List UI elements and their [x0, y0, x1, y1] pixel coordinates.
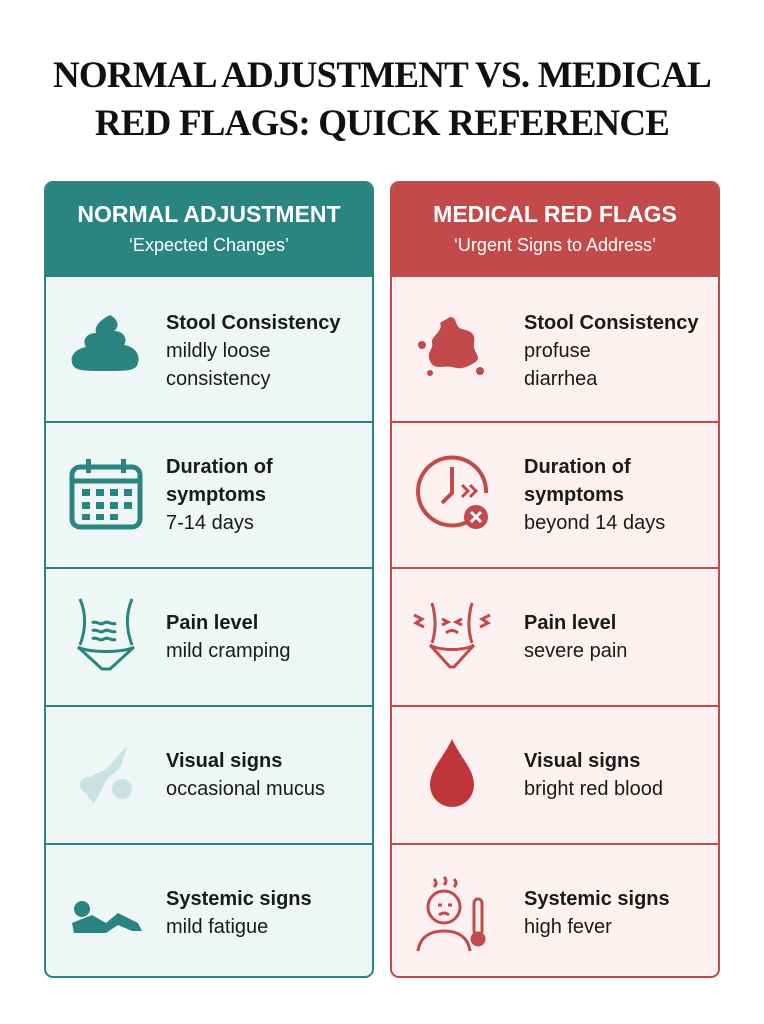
- text: stool red: [524, 312, 698, 390]
- icon: resting person: [72, 901, 142, 933]
- text: systemic red: high fever: [524, 916, 612, 938]
- text: visual: [166, 750, 325, 800]
- title: [53, 55, 711, 144]
- text: systemic red: [524, 888, 670, 938]
- icon: calendar: [70, 459, 142, 530]
- row: stool consistency: [46, 275, 372, 421]
- panel: medical red flags: [390, 181, 720, 978]
- row: duration red: [392, 421, 718, 567]
- icon: abdomen: [77, 598, 135, 670]
- icon: splash: [418, 317, 484, 376]
- icon: fever person: [416, 876, 486, 952]
- header: red flags: [392, 183, 718, 277]
- icon: stool: [72, 315, 138, 371]
- row: systemic: [46, 843, 372, 983]
- row: visual red: [392, 705, 718, 843]
- text: stool: [166, 312, 340, 390]
- text: visual: occasional mucus: [166, 778, 325, 800]
- text: stool red: Stool Consistency: [524, 312, 698, 334]
- text: stool red: profuse: [524, 340, 591, 362]
- text: systemic: mild fatigue: [166, 916, 268, 938]
- text: visual: Visual signs: [166, 750, 282, 772]
- text: stool: mildly loose: [166, 340, 270, 362]
- text: pain red: severe pain: [524, 640, 627, 662]
- icon: pain abdomen: [413, 602, 491, 668]
- icon: blood drop: [430, 739, 474, 807]
- header: normal: ‘Expected Changes’: [129, 235, 289, 255]
- text: stool red: diarrhea: [524, 368, 597, 390]
- icon: clock x: [416, 456, 488, 529]
- text: duration red: beyond 14 days: [524, 512, 665, 534]
- header: normal: NORMAL ADJUSTMENT: [77, 201, 341, 227]
- text: duration: symptoms: [166, 484, 266, 506]
- text: duration red: symptoms: [524, 484, 624, 506]
- text: stool: Stool Consistency: [166, 312, 340, 334]
- text: pain red: [524, 612, 627, 662]
- text: systemic red: Systemic signs: [524, 888, 670, 910]
- icon: mucus: [80, 747, 132, 803]
- text: pain red: Pain level: [524, 612, 616, 634]
- row: systemic red: [392, 843, 718, 983]
- title: NORMAL ADJUSTMENT VS. MEDICAL: [53, 55, 711, 96]
- header: red flags: ‘Urgent Signs to Address’: [454, 235, 656, 255]
- row: stool red: [392, 275, 718, 421]
- header: normal: [46, 183, 372, 277]
- text: systemic: [166, 888, 312, 938]
- row: duration: [46, 421, 372, 567]
- text: duration red: Duration of: [524, 456, 631, 478]
- panel: normal adjustment: [44, 181, 374, 978]
- header: red flags: MEDICAL RED FLAGS: [433, 201, 677, 227]
- text: visual red: [524, 750, 663, 800]
- text: duration: [166, 456, 273, 534]
- row: pain red: [392, 567, 718, 705]
- row: visual: [46, 705, 372, 843]
- text: pain: Pain level: [166, 612, 258, 634]
- row: pain: [46, 567, 372, 705]
- text: duration red: [524, 456, 665, 534]
- text: pain: [166, 612, 290, 662]
- text: systemic: Systemic signs: [166, 888, 312, 910]
- title: RED FLAGS: QUICK REFERENCE: [95, 103, 669, 144]
- text: duration: 7-14 days: [166, 512, 254, 534]
- text: stool: consistency: [166, 368, 270, 390]
- text: visual red: bright red blood: [524, 778, 663, 800]
- text: pain: mild cramping: [166, 640, 290, 662]
- text: duration: Duration of: [166, 456, 273, 478]
- text: visual red: Visual signs: [524, 750, 640, 772]
